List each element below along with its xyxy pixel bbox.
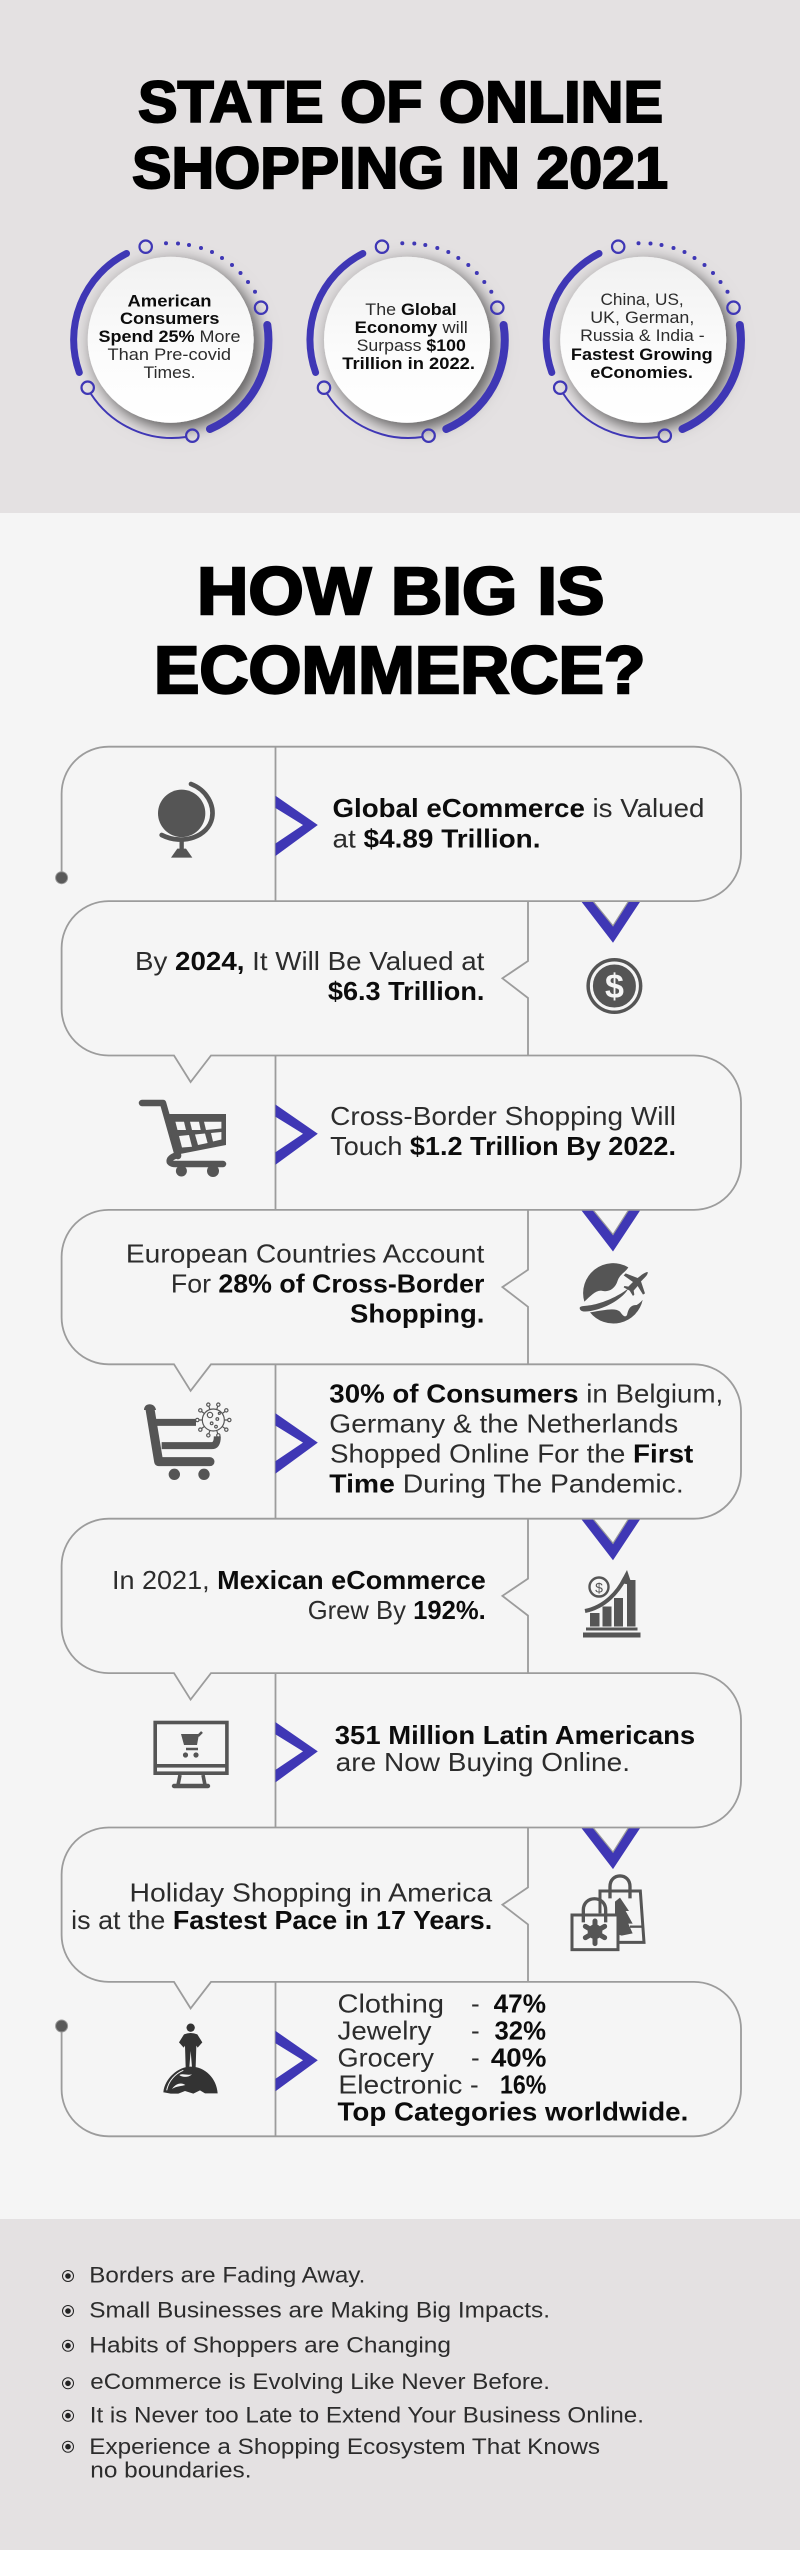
row 1: global ecommerce value: at $4.89 Trillion. bbox=[332, 823, 540, 853]
row 3: cross-border shopping: Cross-Border Shopping Will bbox=[330, 1101, 676, 1131]
row 4: european share: European Countries Account bbox=[126, 1239, 485, 1269]
bullet list: takeaways: It is Never too Late to Extend Your Business Online. bbox=[90, 2403, 644, 2428]
row 1: global ecommerce value bbox=[158, 747, 704, 901]
panel: main background bbox=[0, 513, 800, 2219]
category list: 32% bbox=[494, 2015, 546, 2045]
title: STATE OF ONLINE bbox=[138, 70, 663, 135]
row 5: first-time pandemic shoppers: 30% of Consumers in Belgium, bbox=[329, 1379, 723, 1409]
icon: growth chart: $ bbox=[595, 1580, 603, 1596]
title bbox=[132, 70, 668, 201]
category list: 16% bbox=[500, 2069, 546, 2099]
icon: person on globe bbox=[163, 2023, 218, 2094]
callout circle: global economy: The Global bbox=[365, 300, 457, 319]
category list: Grocery bbox=[338, 2043, 434, 2073]
row 4: european share: Shopping. bbox=[350, 1299, 484, 1329]
bullet list: takeaways: Experience a Shopping Ecosystem That Knows bbox=[89, 2434, 600, 2459]
bullet list: takeaways: Habits of Shoppers are Changing bbox=[89, 2333, 451, 2358]
callout circle: American consumers: Than Pre-covid bbox=[108, 345, 231, 364]
row 8: holiday shopping: is at the Fastest Pace in 17 Years. bbox=[71, 1905, 492, 1935]
row 6: mexican ecommerce: In 2021, Mexican eCommerce bbox=[112, 1565, 486, 1595]
callout circle: American consumers: Spend 25% More bbox=[98, 327, 240, 346]
row 2: 2024 forecast bbox=[135, 901, 642, 1056]
callout circle: global economy: Trillion in 2022. bbox=[342, 354, 475, 373]
callout circle: American consumers: American bbox=[128, 292, 212, 311]
flow outline: serpentine connector bbox=[62, 747, 741, 2136]
bullet list: takeaways: Small Businesses are Making Big Impacts. bbox=[89, 2298, 550, 2323]
icon: desk globe bbox=[158, 784, 212, 858]
callout circle: global economy: Economy will bbox=[355, 318, 468, 337]
callout circle: global economy bbox=[310, 240, 505, 442]
heading: how big is ecommerce: ECOMMERCE? bbox=[154, 633, 646, 708]
row 7: latin american buyers: are Now Buying Online. bbox=[336, 1747, 630, 1777]
category list bbox=[338, 1988, 688, 2127]
callout circle: global economy: Surpass $100 bbox=[357, 336, 466, 355]
category list: - bbox=[471, 2043, 480, 2073]
bullet list: takeaways: no boundaries. bbox=[90, 2458, 252, 2483]
arrows: blue down chevrons bbox=[581, 901, 640, 1869]
heading: how big is ecommerce: HOW BIG IS bbox=[197, 554, 604, 629]
row 2: 2024 forecast: By 2024, It Will Be Valued at bbox=[135, 946, 485, 976]
category list: Jewelry bbox=[338, 2015, 432, 2045]
callout circle: fastest growing economies: eConomies. bbox=[590, 363, 693, 382]
icon: holiday shopping bags bbox=[572, 1876, 644, 1950]
icon: dollar coin bbox=[586, 958, 642, 1014]
row 9: top categories bbox=[163, 1982, 688, 2136]
callout circle: fastest growing economies: Fastest Growing bbox=[571, 345, 713, 364]
category list: Top Categories worldwide. bbox=[338, 2097, 688, 2127]
heading: how big is ecommerce bbox=[154, 554, 646, 708]
row 3: cross-border shopping bbox=[142, 1056, 676, 1210]
bullet list: takeaways bbox=[62, 2263, 644, 2483]
category list: Clothing bbox=[338, 1988, 444, 2018]
row 8: holiday shopping: Holiday Shopping in America bbox=[130, 1878, 493, 1908]
icon: growth chart bbox=[583, 1570, 640, 1638]
row 6: mexican ecommerce: Grew By 192%. bbox=[308, 1595, 486, 1625]
callout circle: American consumers bbox=[74, 240, 268, 442]
panel: header background bbox=[0, 0, 800, 513]
row 2: 2024 forecast: $6.3 Trillion. bbox=[328, 976, 484, 1006]
title: SHOPPING IN 2021 bbox=[132, 136, 668, 201]
category list: 40% bbox=[491, 2043, 546, 2073]
row 8: holiday shopping bbox=[71, 1828, 644, 1982]
panel: footer background bbox=[0, 2219, 800, 2550]
row 6: mexican ecommerce bbox=[112, 1519, 640, 1673]
row 7: latin american buyers: 351 Million Latin Americans bbox=[335, 1720, 695, 1750]
category list: - bbox=[470, 2069, 479, 2099]
callout circle: fastest growing economies bbox=[546, 240, 741, 442]
callout circle: fastest growing economies: Russia & India - bbox=[580, 326, 705, 345]
callout circle: fastest growing economies: China, US, bbox=[600, 290, 684, 309]
row 5: first-time pandemic shoppers: Germany & the Netherlands bbox=[329, 1409, 678, 1439]
icon detail: virus bbox=[196, 1403, 231, 1437]
category list: 47% bbox=[494, 1988, 546, 2018]
row 7: latin american buyers bbox=[155, 1673, 695, 1828]
row 5: first-time pandemic shoppers: Time During The Pandemic. bbox=[329, 1469, 684, 1499]
callout circle: American consumers: Times. bbox=[144, 363, 196, 382]
icon: dollar coin: $ bbox=[605, 968, 624, 1006]
end dot bbox=[56, 2020, 68, 2032]
row 1: global ecommerce value: Global eCommerce is Valued bbox=[332, 793, 704, 823]
category list: - bbox=[471, 2015, 480, 2045]
row 3: cross-border shopping: Touch $1.2 Trillion By 2022. bbox=[330, 1131, 676, 1161]
icon: monitor with cart bbox=[155, 1722, 227, 1786]
row 4: european share bbox=[126, 1210, 648, 1364]
row 5: first-time pandemic shoppers bbox=[144, 1364, 723, 1519]
callout circle: American consumers: Consumers bbox=[120, 309, 220, 328]
callout circle: fastest growing economies: UK, German, bbox=[590, 308, 694, 327]
row 4: european share: For 28% of Cross-Border bbox=[171, 1269, 484, 1299]
row 5: first-time pandemic shoppers: Shopped Online For the First bbox=[330, 1439, 694, 1469]
icon: cart with virus bbox=[144, 1403, 231, 1480]
icon: globe with plane bbox=[580, 1263, 648, 1324]
bullet list: takeaways: eCommerce is Evolving Like Never Before. bbox=[90, 2369, 550, 2394]
category list: - bbox=[471, 1988, 480, 2018]
start dot bbox=[56, 872, 68, 884]
category list: Electronic bbox=[338, 2069, 462, 2099]
bullet list: takeaways: Borders are Fading Away. bbox=[89, 2263, 365, 2288]
icon: shopping cart bbox=[142, 1103, 226, 1177]
